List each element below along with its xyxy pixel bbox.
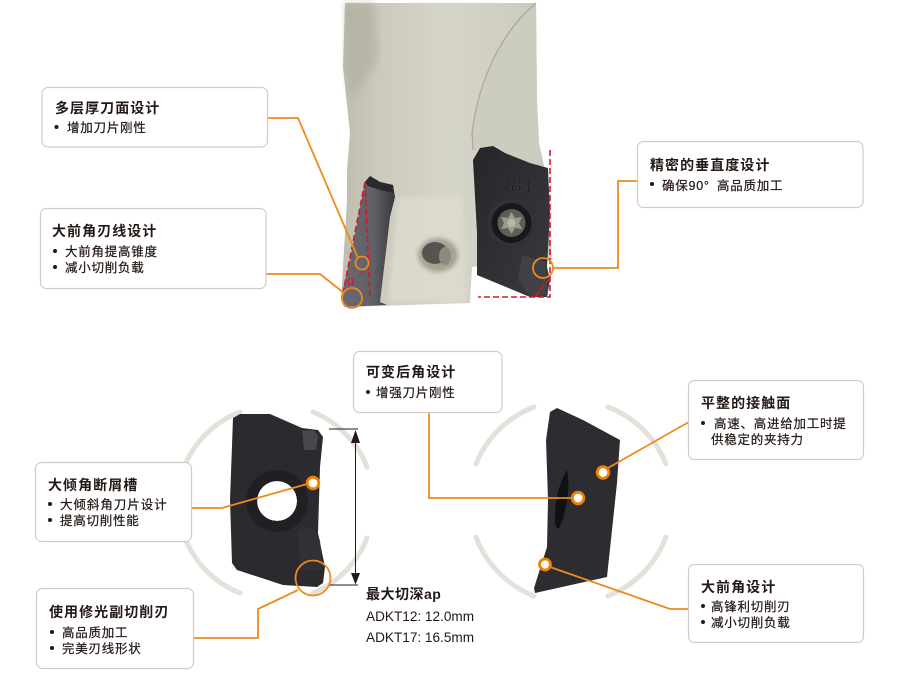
callout: 大倾角断屑槽: 大倾角断屑槽: [48, 477, 138, 493]
mounting hole: [418, 238, 458, 272]
callout: 大前角设计: 减小切削负载: [711, 616, 791, 630]
callout marker rings: [296, 256, 609, 596]
callout: 大前角刃线设计: [40, 208, 266, 288]
callout: 精密的垂直度设计: 确保90°: [662, 179, 710, 193]
callout: 大前角刃线设计: 大前角刃线设计: [52, 223, 157, 239]
red dashed angle guides: [343, 150, 550, 299]
callout: 多层厚刀面设计: [42, 88, 268, 147]
text: maximum cut depth: ADKT17: 16.5mm: [366, 630, 474, 645]
ring markers on the tool: [356, 256, 368, 270]
dot markers on inserts: [307, 477, 319, 489]
callout: 多层厚刀面设计: 多层厚刀面设计: [55, 100, 160, 116]
callout: 大倾角断屑槽: 大倾斜角刀片设计: [60, 497, 168, 512]
callout: 大倾角断屑槽: [36, 462, 192, 542]
leader: flat contact: [608, 422, 689, 468]
red dashed angle guides: °: [360, 270, 364, 280]
callout: 大前角刃线设计: 减小切削负载: [65, 261, 145, 275]
callout: 可变后角设计: 增强刀片刚性: [376, 385, 456, 400]
text: maximum cut depth: ADKT12: 12.0mm: [366, 609, 474, 624]
ring marker on wiper edge: [296, 560, 330, 596]
callout: 精密的垂直度设计: 精密的垂直度设计: [650, 157, 770, 173]
callout: 大前角设计: [688, 564, 864, 642]
right insert side view: [476, 407, 666, 596]
leader: thick rake face: [267, 118, 358, 258]
red dashed angle guides: α: [347, 273, 355, 288]
callout: 使用修光副切削刃: [36, 588, 194, 668]
callout: 大前角设计: 高锋利切削刃: [711, 599, 791, 614]
tool body: [341, 3, 552, 307]
left insert front view: [185, 412, 367, 593]
callout: 大前角刃线设计: 大前角提高锥度: [65, 244, 158, 259]
leader: variable clearance: [429, 412, 572, 498]
leader: perpendicularity: [553, 181, 638, 268]
callout: 可变后角设计: [354, 352, 502, 412]
callout: 平整的接触面: 平整的接触面: [701, 395, 791, 411]
callout: 使用修光副切削刃: 高品质加工: [62, 625, 128, 640]
dimension: maximum cut depth: [329, 429, 360, 585]
callout leader lines: [191, 118, 689, 638]
text: maximum cut depth: [366, 586, 474, 645]
insert body: [534, 408, 620, 593]
leader: chip breaker: [191, 484, 307, 508]
callout: 平整的接触面: [688, 380, 864, 460]
callout: 可变后角设计: 可变后角设计: [366, 364, 456, 380]
callout: 使用修光副切削刃: 完美刃线形状: [62, 641, 142, 656]
callout: 精密的垂直度设计: 高品质加工: [717, 178, 783, 193]
right insert: [473, 146, 550, 297]
left pocket insert: [341, 176, 395, 307]
callout: 大前角设计: 大前角设计: [701, 579, 776, 595]
grey circle arcs: [476, 407, 666, 596]
leader: wiper edge: [193, 590, 298, 638]
leader: large rake: [550, 567, 689, 609]
callout: 平整的接触面: 供稳定的夹持力: [711, 432, 804, 447]
milling cutter tool photo: [341, 3, 552, 307]
callout: 大倾角断屑槽: 提高切削性能: [60, 513, 140, 528]
grey circle arcs: [185, 412, 367, 593]
milling cutter tool photo: 081: [498, 173, 536, 197]
callout: 平整的接触面: 高速、高进给加工时提: [714, 416, 847, 431]
callout: 多层厚刀面设计: 增加刀片刚性: [67, 120, 147, 135]
text: maximum cut depth: 最大切深ap: [366, 586, 441, 602]
callout: 精密的垂直度设计: [638, 142, 863, 208]
screw: [488, 199, 536, 247]
callout: 使用修光副切削刃: 使用修光副切削刃: [49, 604, 169, 620]
insert body: [230, 414, 325, 587]
leader: large rake edge: [266, 274, 344, 293]
